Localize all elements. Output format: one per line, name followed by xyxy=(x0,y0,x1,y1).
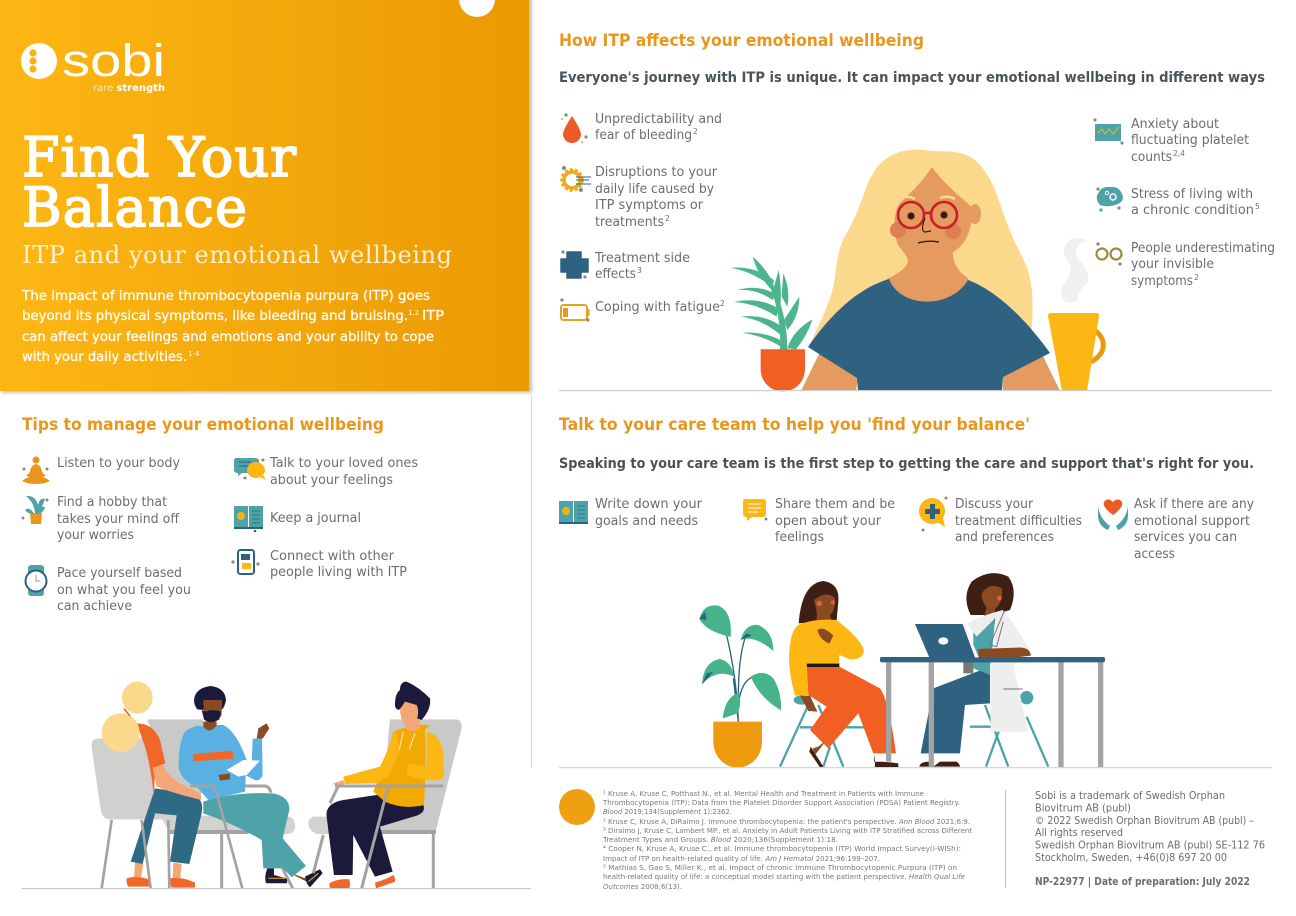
references: ¹ Kruse A, Kruse C, Potthast N., et al. Mental Health and Treatment in Patients with Immune xyxy=(603,789,924,798)
text: discuss: Discuss your xyxy=(955,496,1033,512)
text: underestimating: your invisible xyxy=(1131,256,1214,272)
right chair xyxy=(308,719,462,888)
icon: stress cloud xyxy=(1096,187,1123,212)
references: health-related quality of life: a conceptual model starting with the patient perspective. Health Qual Life xyxy=(603,872,965,881)
subheading: first step: Speaking to your care team is the first step to getting the care and support that's right for you. xyxy=(559,456,1254,472)
potted plant xyxy=(699,605,781,768)
arms xyxy=(801,352,858,391)
text: pace: can achieve xyxy=(57,598,132,614)
doctor xyxy=(919,573,1031,767)
icon: potted plant xyxy=(22,496,48,524)
intro paragraph: The impact of immune thrombocytopenia purpura (ITP) goes xyxy=(21,289,430,304)
panel: orange title banner xyxy=(0,0,532,393)
title: Find Your xyxy=(22,126,296,189)
icon: meditation xyxy=(22,456,50,484)
text: stress xyxy=(1131,186,1260,218)
left chair frame xyxy=(102,786,242,888)
text: hobby: Find a hobby that xyxy=(57,494,167,510)
icon: hands holding heart xyxy=(1098,500,1128,530)
blonde woman from behind xyxy=(102,682,202,888)
text: connect: Connect with other xyxy=(270,548,394,564)
text: share: open about your xyxy=(775,513,881,529)
person in yellow hoodie xyxy=(327,682,444,888)
references: Impact of ITP on health-related quality of life. Am J Hematol 2021;96:199–207. xyxy=(603,854,880,863)
intro paragraph xyxy=(21,289,444,365)
intro paragraph: 1,2 xyxy=(408,309,419,317)
panel: tips to manage wellbeing xyxy=(22,415,418,614)
desk xyxy=(880,657,1105,767)
icon: goals book xyxy=(559,501,588,524)
text: disruptions: Disruptions to your xyxy=(595,164,717,180)
text: treatment side effects: 3 xyxy=(637,266,642,275)
text: listen: Listen to your body xyxy=(57,455,180,471)
text: treatment side effects xyxy=(594,250,690,282)
logo: sobi rare strength: sobi xyxy=(62,35,165,86)
references: Outcomes 2008;6(13). xyxy=(603,882,682,891)
intro paragraph: with your daily activities. xyxy=(22,350,187,365)
text: connect: people living with ITP xyxy=(270,564,407,580)
title xyxy=(22,126,296,239)
icon: medical speech bubble xyxy=(919,496,948,532)
text: fatigue: Coping with fatigue xyxy=(595,299,720,315)
intro paragraph: ITP xyxy=(422,309,444,324)
references: Thrombocytopenia (ITP): Data from the Platelet Disorder Support Association (PDSA) Patient Registry. xyxy=(602,798,960,807)
text: anxiety: 2,4 xyxy=(1173,149,1185,158)
text: hobby: takes your mind off xyxy=(57,511,180,527)
references: ⁵ Mathias S, Gao S, Miller K., et al. Impact of chronic Immune Thrombocytopenic Purpura (ITP) on xyxy=(603,863,957,872)
doctor chair xyxy=(970,691,1048,767)
subtitle: ITP and your emotional wellbeing xyxy=(22,241,452,269)
face and neck xyxy=(885,167,973,305)
text: disruptions: treatments xyxy=(595,214,664,230)
text: ask xyxy=(1134,496,1254,562)
references: Treatment Types and Groups. Blood 2020;136(Supplement 1):18. xyxy=(602,835,838,844)
text: disruptions: ITP symptoms or xyxy=(595,197,703,213)
text: stress: 5 xyxy=(1255,202,1260,211)
text: goals: Write down your xyxy=(595,496,702,512)
icon: phone xyxy=(231,550,260,574)
text: goals: goals and needs xyxy=(595,513,698,529)
text: pace: on what you feel you xyxy=(57,582,191,598)
text: anxiety: counts xyxy=(1131,149,1172,165)
middle chair xyxy=(147,719,295,888)
text: treatment side effects: Treatment side xyxy=(594,250,690,266)
text: disruptions: 2 xyxy=(665,214,670,223)
text: underestimating xyxy=(1131,240,1275,289)
text: loved ones: about your feelings xyxy=(270,472,393,488)
text: loved ones: Talk to your loved ones xyxy=(269,455,418,471)
text: pace xyxy=(57,565,191,614)
icon: blood drop xyxy=(561,113,588,143)
text: disruptions xyxy=(595,164,717,230)
legal text: All rights reserved xyxy=(1035,826,1123,839)
text: anxiety: fluctuating platelet xyxy=(1131,132,1249,148)
text: loved ones xyxy=(269,455,418,488)
text: share xyxy=(775,496,895,545)
text: share: feelings xyxy=(775,529,824,545)
text: anxiety xyxy=(1131,116,1249,165)
plant xyxy=(730,257,813,391)
text: share: Share them and be xyxy=(775,496,895,512)
text: fatigue: 2 xyxy=(720,299,725,308)
text: ask: Ask if there are any xyxy=(1134,496,1254,512)
text: discuss: treatment difficulties xyxy=(955,513,1082,529)
references xyxy=(602,789,972,891)
text: treatment side effects: effects xyxy=(595,266,636,282)
patient xyxy=(789,581,898,767)
text: hobby: your worries xyxy=(57,527,134,543)
legal text: Stockholm, Sweden, +46(0)8 697 20 00 xyxy=(1035,851,1227,864)
references: Blood 2019;134(Supplement 1):2362. xyxy=(603,807,732,816)
text: ask: emotional support xyxy=(1134,513,1250,529)
text: unpredictability: 2 xyxy=(693,127,698,136)
text: unpredictability xyxy=(595,111,722,143)
references: ⁴ Cooper N, Kruse A, Kruse C., et al. Immune thrombocytopenia (ITP) World Impact Survey(I-WISh): xyxy=(603,844,961,853)
icon: medical cross xyxy=(561,250,588,279)
text: connect xyxy=(270,548,407,580)
legal text: NP-22977 | Date of preparation: July 2022 xyxy=(1035,875,1250,888)
text: pace: Pace yourself based xyxy=(57,565,182,581)
text: unpredictability: fear of bleeding xyxy=(595,127,692,143)
icon: gear xyxy=(562,166,591,192)
icon: chat bubbles xyxy=(234,458,266,480)
icon: glasses xyxy=(1096,242,1122,266)
heading: tips: Tips to manage your emotional wellbeing xyxy=(22,415,384,435)
text: hobby xyxy=(57,494,180,543)
legal text: © 2022 Swedish Orphan Biovitrum AB (publ) – xyxy=(1035,814,1254,827)
text: journal: Keep a journal xyxy=(270,510,361,526)
decorative orange circle xyxy=(559,789,595,825)
icon: journal xyxy=(234,506,263,532)
mug and steam xyxy=(1048,238,1103,391)
text: anxiety: Anxiety about xyxy=(1131,116,1219,132)
text: goals xyxy=(595,496,702,529)
illustration: woman with plant and mug xyxy=(730,150,1103,391)
text: underestimating: 2 xyxy=(1194,273,1199,282)
intro paragraph: 1-4 xyxy=(188,350,200,358)
text: discuss: and preferences xyxy=(955,529,1054,545)
laptop xyxy=(915,624,979,657)
list: emotional impacts right xyxy=(1093,116,1275,289)
intro paragraph: beyond its physical symptoms, like bleeding and bruising. xyxy=(22,309,408,324)
references: ³ Diraimo J, Kruse C, Lambert MP., et al. Anxiety in Adult Patients Living with ITP Stratified across Different xyxy=(603,826,972,835)
logo: sobi rare strength: rare strength xyxy=(93,83,165,94)
list: emotional impacts left xyxy=(560,111,725,322)
icon: low battery xyxy=(560,298,590,322)
icon: platelet chart xyxy=(1093,118,1124,145)
heading: how ITP affects: How ITP affects your emotional wellbeing xyxy=(559,31,924,51)
illustration: patient and doctor at a desk xyxy=(699,573,1105,768)
intro paragraph: can affect your feelings and emotions and your ability to cope xyxy=(22,330,434,345)
legal text: Sobi is a trademark of Swedish Orphan xyxy=(1035,789,1225,802)
references: ² Kruse C, Kruse A, DiRaimo J. Immune thrombocytopenia: the patient's perspective. Ann Blood 2021;6:9. xyxy=(603,817,970,826)
shirt xyxy=(808,279,1050,391)
heading: care team: Talk to your care team to help you 'find your balance' xyxy=(559,415,1030,435)
right chair arm xyxy=(335,786,443,888)
logo: sobi rare strength xyxy=(21,35,165,94)
text: underestimating: symptoms xyxy=(1131,273,1193,289)
patient chair xyxy=(780,695,867,767)
text: discuss xyxy=(955,496,1082,545)
legal text xyxy=(1035,789,1265,888)
hair xyxy=(810,150,1033,345)
text: underestimating: People underestimating xyxy=(1131,240,1275,256)
legal text: Biovitrum AB (publ) xyxy=(1035,802,1131,814)
left chair xyxy=(92,738,172,819)
panel: talk to your care team xyxy=(559,415,1254,562)
text: disruptions: daily life caused by xyxy=(595,181,714,197)
text: ask: services you can xyxy=(1134,529,1237,545)
icon: watch xyxy=(26,565,46,596)
text: ask: access xyxy=(1134,546,1175,562)
icon: note bubble xyxy=(743,499,768,521)
text: stress: a chronic condition xyxy=(1131,202,1254,218)
text: stress: Stress of living with xyxy=(1131,186,1253,202)
man in blue sweater xyxy=(179,686,323,887)
illustration: three people seated talking xyxy=(92,682,462,888)
legal text: Swedish Orphan Biovitrum AB (publ) SE-112 76 xyxy=(1035,838,1265,852)
text: unpredictability: Unpredictability and xyxy=(595,111,722,127)
subheading: journey: Everyone's journey with ITP is unique. It can impact your emotional wellbeing in different ways xyxy=(559,70,1265,86)
title: Balance xyxy=(22,176,247,239)
